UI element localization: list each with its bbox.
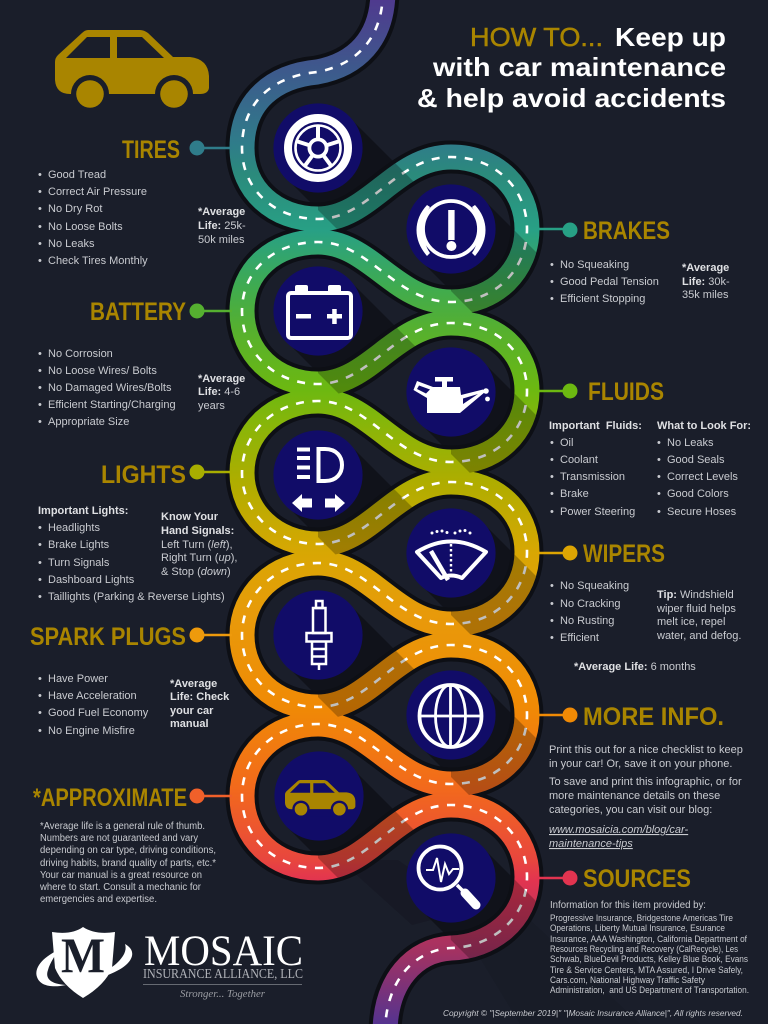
list: important fluids: Power Steering: [560, 506, 635, 518]
average life: spark plugs: your car: [170, 705, 214, 717]
link: blog: www.mosaicia.com/blog/car-: [549, 824, 689, 836]
average life: battery: years: [198, 400, 225, 412]
list: important fluids: •: [550, 506, 554, 518]
list: wipers: •: [550, 598, 554, 610]
list: what to look for: No Leaks: [667, 437, 714, 449]
text: more info: Print this out for a nice checklist to keep: [549, 744, 743, 756]
list: important lights: •: [38, 522, 42, 534]
title: with car maintenance: [432, 52, 726, 82]
winding road: [242, 0, 527, 1024]
link: blog: maintenance-tips: [549, 838, 633, 850]
list: what to look for: •: [657, 454, 661, 466]
logo: Mosaic Insurance Alliance: [36, 927, 303, 1000]
list: spark plugs: Good Fuel Economy: [48, 707, 149, 719]
list: tires: Good Tread: [48, 169, 106, 181]
list: tires: Correct Air Pressure: [48, 186, 147, 198]
text: approximate: depending on car type, driving conditions,: [40, 845, 216, 856]
connector: fluids: [537, 384, 578, 398]
list: battery: •: [38, 348, 42, 360]
average life: battery: *Average: [198, 373, 245, 385]
icon: oil can: [406, 347, 496, 437]
panel: lights: [38, 461, 237, 603]
long shadows on the ground: [287, 117, 640, 1024]
connector: brakes: [537, 222, 578, 238]
list: battery: •: [38, 416, 42, 428]
average life: battery: 4-6: [224, 386, 240, 398]
list: what to look for: What to Look For:: [657, 420, 751, 432]
text: sources: Information for this item provided by:: [550, 900, 706, 911]
tip: Tip:: [657, 589, 677, 601]
icon: tire: [273, 103, 363, 193]
list: important fluids: •: [550, 454, 554, 466]
panel: fluids: [537, 378, 751, 518]
icon: headlight and arrows: [273, 430, 363, 520]
list: wipers: No Rusting: [560, 615, 614, 627]
list: wipers: No Squeaking: [560, 580, 629, 592]
heading: spark plugs: SPARK PLUGS: [30, 623, 186, 651]
average life: brakes: Life:: [682, 276, 705, 288]
connector: lights: [190, 464, 232, 480]
text: approximate: *Average life is a general rule of thumb.: [40, 821, 205, 832]
text: approximate: Your car manual is a great resource on: [40, 870, 202, 881]
text: approximate: emergencies and expertise.: [40, 894, 157, 905]
average life: brakes: 30k-: [708, 276, 730, 288]
tip: Windshield: [680, 589, 734, 601]
list: tires: •: [38, 238, 42, 250]
hand signals: Left Turn (left),: [161, 539, 233, 551]
text: more info: in your car! Or, save it on your phone.: [549, 758, 732, 770]
list: spark plugs: No Engine Misfire: [48, 725, 135, 737]
text: approximate: driving habits, brand quality of parts, etc.*: [40, 858, 216, 869]
title: [417, 22, 726, 113]
list: important lights: •: [38, 574, 42, 586]
heading: approximate: *APPROXIMATE: [33, 784, 187, 812]
panel: brakes: [537, 217, 730, 305]
list: wipers: •: [550, 580, 554, 592]
average life: wipers: 6 months: [651, 661, 696, 673]
list: what to look for: •: [657, 437, 661, 449]
text: more info: categories, you can visit our blog:: [549, 804, 712, 816]
list: tires: •: [38, 255, 42, 267]
logo tagline: Stronger... Together: [180, 989, 265, 1000]
list: brakes: No Squeaking: [560, 259, 629, 271]
list: what to look for: •: [657, 471, 661, 483]
text: sources: Operations, Liberty Mutual Insurance, Esurance: [550, 923, 725, 934]
tip: water, and defog.: [656, 630, 741, 642]
list: brakes: •: [550, 276, 554, 288]
title: & help avoid accidents: [417, 83, 726, 113]
logo mark: shield: M: [61, 927, 105, 983]
hand signals: Know Your: [161, 511, 219, 523]
list: important fluids: Brake: [560, 488, 589, 500]
icon: small car: [274, 751, 364, 841]
list: brakes: •: [550, 259, 554, 271]
list: important lights: Turn Signals: [48, 557, 110, 569]
list: important fluids: •: [550, 471, 554, 483]
connector: tires: [190, 140, 232, 156]
panel: sources: [537, 865, 751, 996]
list: brakes: Good Pedal Tension: [560, 276, 659, 288]
heading: wipers: WIPERS: [583, 540, 665, 568]
list: important lights: Brake Lights: [48, 539, 110, 551]
list: tires: •: [38, 186, 42, 198]
list: battery: •: [38, 365, 42, 377]
icon: large car: [55, 30, 209, 113]
list: brakes: •: [550, 293, 554, 305]
logo mark: shield: [36, 927, 132, 998]
list: spark plugs: Have Acceleration: [48, 690, 137, 702]
hand signals: & Stop (down): [161, 566, 231, 578]
connector: approximate: [190, 788, 232, 804]
average life: tires: Life:: [198, 220, 221, 232]
average life: tires: 50k miles: [198, 234, 245, 246]
tip: melt ice, repel: [657, 616, 725, 628]
list: battery: No Loose Wires/ Bolts: [48, 365, 157, 377]
average life: wipers: *Average Life:: [574, 661, 648, 673]
list: tires: Check Tires Monthly: [48, 255, 148, 267]
list: tires: •: [38, 203, 42, 215]
heading: battery: BATTERY: [90, 298, 186, 326]
list: wipers: No Cracking: [560, 598, 621, 610]
list: important lights: Taillights (Parking & Reverse Lights): [48, 591, 225, 603]
title: Keep up: [615, 22, 726, 52]
list: spark plugs: •: [38, 707, 42, 719]
text: sources: Tire & Service Centers, MTA Assured, I Drive Safely,: [550, 965, 743, 976]
list: important lights: Important Lights:: [38, 505, 128, 517]
list: important fluids: Coolant: [560, 454, 598, 466]
icon: globe: [406, 670, 496, 760]
heading: sources: SOURCES: [583, 865, 691, 893]
average life: spark plugs: Life: Check: [170, 691, 230, 703]
list: battery: •: [38, 382, 42, 394]
panel: more info: [537, 703, 743, 850]
list: important lights: •: [38, 591, 42, 603]
panel: approximate: [33, 784, 232, 905]
list: important lights: •: [38, 557, 42, 569]
icon: windshield wiper: [406, 508, 496, 598]
list: important fluids: Oil: [560, 437, 573, 449]
panel: tires: [38, 136, 246, 267]
list: tires: •: [38, 221, 42, 233]
text: more info: To save and print this infographic, or for: [549, 776, 742, 788]
average life: brakes: 35k miles: [682, 289, 729, 301]
panel: wipers: [537, 540, 741, 673]
copyright: Copyright © "|September 2019|" "|Mosaic Insurance Alliance|", All rights reserved.: [443, 1008, 743, 1018]
logo subtitle: INSURANCE ALLIANCE, LLC: [143, 967, 303, 982]
average life: battery: Life:: [198, 386, 221, 398]
list: wipers: Efficient: [560, 632, 599, 644]
list: important fluids: •: [550, 437, 554, 449]
panel: spark plugs: [30, 623, 232, 737]
list: what to look for: •: [657, 506, 661, 518]
heading: brakes: BRAKES: [583, 217, 670, 245]
list: spark plugs: •: [38, 690, 42, 702]
list: brakes: Efficient Stopping: [560, 293, 645, 305]
list: tires: No Leaks: [48, 238, 95, 250]
text: sources: Cars.com, National Highway Traffic Safety: [550, 975, 705, 986]
list: important fluids: •: [550, 488, 554, 500]
tip: wiper fluid helps: [656, 603, 736, 615]
list: important fluids: Important Fluids:: [549, 420, 642, 432]
list: spark plugs: •: [38, 673, 42, 685]
list: wipers: •: [550, 615, 554, 627]
icon: battery: [273, 266, 363, 356]
hand signals: Hand Signals:: [161, 525, 234, 537]
average life: spark plugs: manual: [170, 718, 209, 730]
connector: battery: [190, 304, 232, 318]
average life: tires: *Average: [198, 206, 245, 218]
list: wipers: •: [550, 632, 554, 644]
list: tires: No Dry Rot: [48, 203, 102, 215]
list: battery: No Damaged Wires/Bolts: [48, 382, 172, 394]
heading: tires: TIRES: [122, 136, 180, 164]
list: battery: Efficient Starting/Charging: [48, 399, 176, 411]
list: what to look for: Secure Hoses: [667, 506, 737, 518]
average life: spark plugs: *Average: [170, 678, 217, 690]
list: spark plugs: •: [38, 725, 42, 737]
average life: tires: 25k-: [224, 220, 246, 232]
panel: battery: [38, 298, 245, 428]
list: tires: •: [38, 169, 42, 181]
connector: sources: [537, 870, 578, 886]
icon: brake warning: [406, 184, 496, 274]
average life: brakes: *Average: [682, 262, 729, 274]
list: what to look for: •: [657, 488, 661, 500]
list: what to look for: Good Seals: [667, 454, 725, 466]
text: approximate: where to start. Consult a mechanic for: [39, 882, 202, 893]
text: sources: Progressive Insurance, Bridgestone Americas Tire: [550, 913, 733, 924]
list: what to look for: Correct Levels: [667, 471, 738, 483]
text: approximate: Numbers are not guaranteed and vary: [40, 833, 198, 844]
list: important lights: Headlights: [48, 522, 100, 534]
list: important lights: Dashboard Lights: [48, 574, 135, 586]
list: what to look for: Good Colors: [667, 488, 729, 500]
connector: wipers: [537, 546, 578, 560]
list: important fluids: Transmission: [560, 471, 625, 483]
list: tires: No Loose Bolts: [48, 221, 123, 233]
icon: magnifier with pulse: [406, 833, 496, 923]
heading: lights: LIGHTS: [101, 461, 186, 489]
list: spark plugs: Have Power: [48, 673, 108, 685]
icon: spark plug: [273, 590, 363, 680]
list: battery: Appropriate Size: [48, 416, 129, 428]
heading: more info: MORE INFO.: [583, 703, 724, 731]
list: important lights: •: [38, 539, 42, 551]
hand signals: Right Turn (up),: [161, 552, 237, 564]
connector: spark plugs: [190, 628, 232, 642]
title: HOW TO...: [470, 22, 603, 52]
heading: fluids: FLUIDS: [588, 378, 664, 406]
list: battery: No Corrosion: [48, 348, 113, 360]
logo wordmark: MOSAIC: [144, 928, 303, 975]
list: battery: •: [38, 399, 42, 411]
text: more info: more maintenance details on these: [549, 790, 720, 802]
connector: more info: [537, 708, 578, 722]
